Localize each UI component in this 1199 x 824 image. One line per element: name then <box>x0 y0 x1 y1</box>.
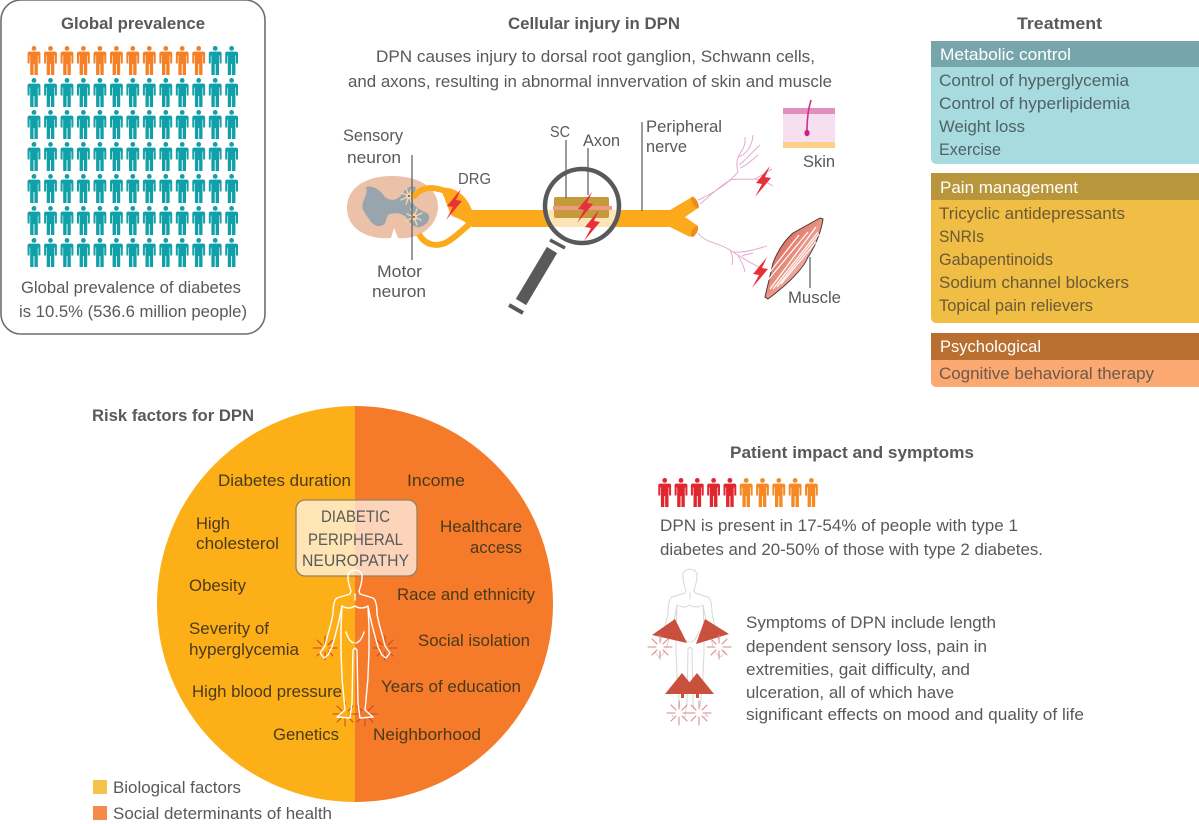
card: psychological: Psychological <box>940 337 1041 356</box>
labels and leader lines: Peripheral <box>646 117 722 136</box>
biological factor labels <box>189 471 351 744</box>
biological factor labels: Obesity <box>189 576 246 595</box>
text: DPN prevalence: diabetes and 20-50% of those with type 2 diabetes. <box>660 540 1043 559</box>
heading: global prevalence: Global prevalence <box>61 14 205 33</box>
caption: global prevalence: Global prevalence of diabetes <box>21 278 241 297</box>
panel: cellular injury <box>343 14 841 313</box>
magnifier <box>509 165 624 313</box>
center label: diabetic peripheral neuropathy: NEUROPATHY <box>302 551 409 570</box>
card: pain management: Topical pain relievers <box>939 296 1093 315</box>
caption: global prevalence <box>19 278 247 321</box>
heading: cellular injury: Cellular injury in DPN <box>508 14 680 33</box>
biological factor labels: cholesterol <box>196 534 279 553</box>
text: DPN prevalence <box>660 516 1043 559</box>
card: psychological <box>931 333 1199 387</box>
biological factor labels: High <box>196 514 230 533</box>
card: pain management: SNRIs <box>939 227 984 246</box>
social determinant labels: Social isolation <box>418 631 530 650</box>
heading: risk factors: Risk factors for DPN <box>92 406 254 425</box>
legend <box>93 778 332 823</box>
biological factor labels: Genetics <box>273 725 339 744</box>
icon: body with symptom areas <box>648 569 731 725</box>
center label: diabetic peripheral neuropathy <box>296 500 417 576</box>
text: symptoms: Symptoms of DPN include length <box>746 613 996 632</box>
labels and leader lines: Axon <box>583 131 620 150</box>
labels and leader lines: nerve <box>646 137 687 156</box>
card: pain management: Sodium channel blockers <box>939 273 1129 292</box>
labels and leader lines: DRG <box>458 171 491 188</box>
nerve ending bolts <box>752 166 771 288</box>
center label: diabetic peripheral neuropathy: DIABETIC <box>321 507 390 526</box>
injury bolts <box>446 189 600 241</box>
labels and leader lines: Skin <box>803 152 835 171</box>
legend: Biological factors <box>113 778 241 797</box>
card: psychological: Cognitive behavioral therapy <box>939 364 1154 383</box>
card: pain management: Gabapentinoids <box>939 250 1053 269</box>
center label: diabetic peripheral neuropathy: PERIPHERAL <box>308 530 403 549</box>
icon: body outline with pain points <box>313 570 397 726</box>
social determinant labels: access <box>470 538 522 557</box>
nerve endings <box>698 135 773 272</box>
intro text: DPN causes injury to dorsal root ganglion, Schwann cells, <box>376 47 815 66</box>
legend: Social determinants of health <box>113 804 332 823</box>
panel: treatment <box>931 14 1199 387</box>
text: symptoms: ulceration, all of which have <box>746 683 954 702</box>
panel: global prevalence <box>1 0 265 334</box>
pictogram: people grid <box>28 46 238 267</box>
caption: global prevalence: is 10.5% (536.6 million people) <box>19 302 247 321</box>
panel: patient impact <box>648 443 1084 725</box>
biological factor labels: High blood pressure <box>192 682 342 701</box>
text: symptoms: extremities, gait difficulty, and <box>746 660 970 679</box>
social determinant labels: Race and ethnicity <box>397 585 535 604</box>
pictogram: ten people <box>658 478 818 507</box>
labels and leader lines: neuron <box>347 148 401 167</box>
card: pain management <box>931 173 1199 323</box>
labels and leader lines: neuron <box>372 282 426 301</box>
text: symptoms: significant effects on mood and quality of life <box>746 705 1084 724</box>
card: metabolic control <box>931 41 1199 164</box>
biological factor labels: Severity of <box>189 619 269 638</box>
card: metabolic control: Metabolic control <box>940 45 1071 64</box>
icon: muscle <box>765 218 823 299</box>
social determinant labels: Years of education <box>381 677 521 696</box>
card: metabolic control: Weight loss <box>939 117 1025 136</box>
peripheral nerve <box>413 188 700 245</box>
text: symptoms: dependent sensory loss, pain in <box>746 637 987 656</box>
circle chart: biological vs social factors <box>157 406 553 802</box>
card: pain management: Pain management <box>940 178 1078 197</box>
labels and leader lines <box>343 117 841 307</box>
social determinant labels <box>373 471 535 744</box>
labels and leader lines: SC <box>550 124 570 141</box>
spinal cord <box>347 176 438 238</box>
card: metabolic control: Control of hyperlipidemia <box>939 94 1131 113</box>
card: pain management: Tricyclic antidepressants <box>939 204 1125 223</box>
biological factor labels: hyperglycemia <box>189 640 300 659</box>
card: metabolic control: Exercise <box>939 140 1001 159</box>
icon: skin <box>783 100 835 148</box>
social determinant labels: Income <box>407 471 465 490</box>
card: metabolic control: Control of hyperglycemia <box>939 71 1130 90</box>
heading: treatment: Treatment <box>1017 14 1102 33</box>
labels and leader lines: Muscle <box>788 288 841 307</box>
social determinant labels: Healthcare <box>440 517 522 536</box>
biological factor labels: Diabetes duration <box>218 471 351 490</box>
intro text: and axons, resulting in abnormal innvervation of skin and muscle <box>348 72 832 91</box>
social determinant labels: Neighborhood <box>373 725 481 744</box>
labels and leader lines: Motor <box>377 262 422 281</box>
intro text <box>348 47 832 91</box>
labels and leader lines: Sensory <box>343 126 403 145</box>
panel: risk factors <box>92 406 553 823</box>
text: symptoms <box>746 613 1084 724</box>
heading: patient impact: Patient impact and symptoms <box>730 443 974 462</box>
text: DPN prevalence: DPN is present in 17-54% of people with type 1 <box>660 516 1018 535</box>
